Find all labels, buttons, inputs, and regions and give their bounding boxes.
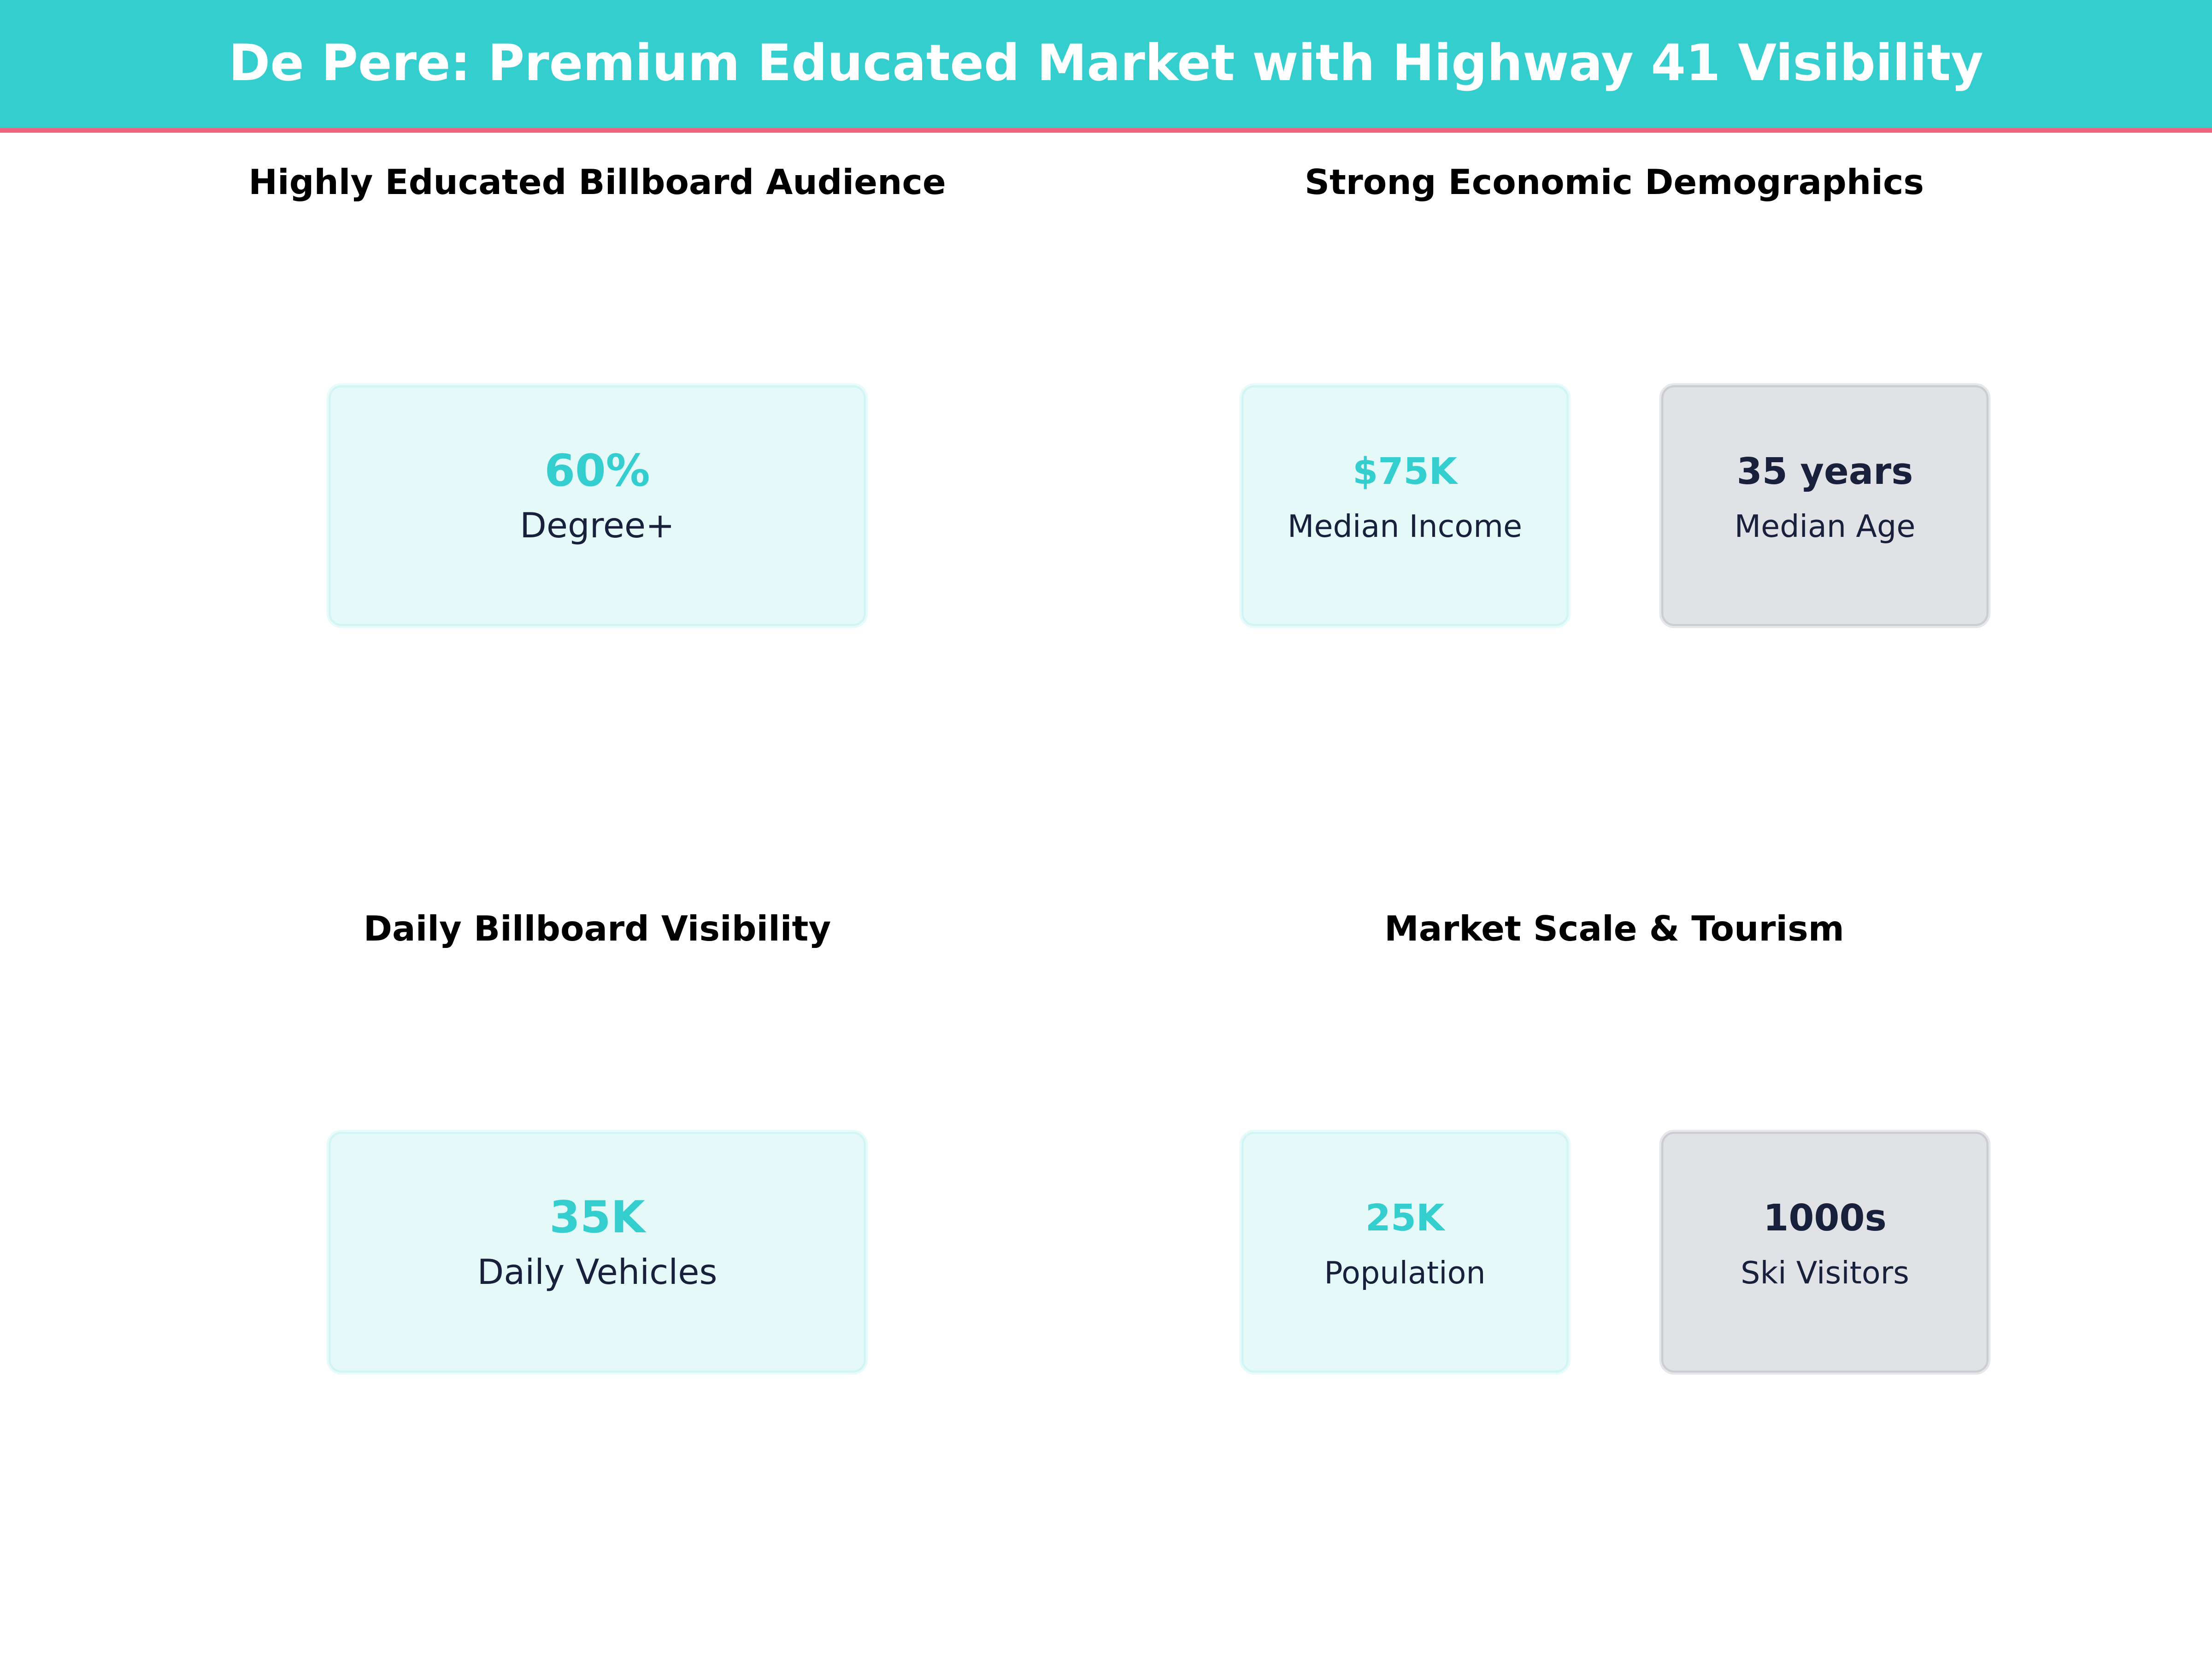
header banner [0,0,2212,133]
card: median age: Median Age [1735,508,1915,544]
card: daily vehicles: 35K [549,1191,647,1243]
card: population: Population [1324,1255,1486,1291]
card: median income [1241,385,1569,626]
panel: visibility [329,908,866,1372]
card: daily vehicles [329,1132,866,1372]
title: De Pere: Premium Educated Market with Highway 41 Visibility [229,34,1983,92]
card: population [1241,1132,1569,1372]
card: median age [1661,385,1988,626]
card: median income: $75K [1353,450,1458,493]
card: median income: Median Income [1288,508,1522,544]
heading: market scale: Market Scale & Tourism [1384,908,1844,949]
card: daily vehicles: Daily Vehicles [477,1252,717,1292]
heading: economics: Strong Economic Demographics [1305,162,1924,202]
card: ski visitors: 1000s [1763,1196,1887,1239]
card: median age: 35 years [1737,450,1913,493]
card: 60% degree: 60% [544,445,650,496]
card: 60% degree [329,385,866,626]
card: population: 25K [1365,1196,1446,1239]
panel: market scale [1241,908,1988,1372]
card: ski visitors: Ski Visitors [1741,1255,1909,1291]
heading: education: Highly Educated Billboard Audience [248,162,946,202]
panel: economics [1241,162,1988,626]
card: ski visitors [1661,1132,1988,1372]
card: 60% degree: Degree+ [520,505,675,546]
panel: education [248,162,946,626]
heading: visibility: Daily Billboard Visibility [364,908,831,949]
